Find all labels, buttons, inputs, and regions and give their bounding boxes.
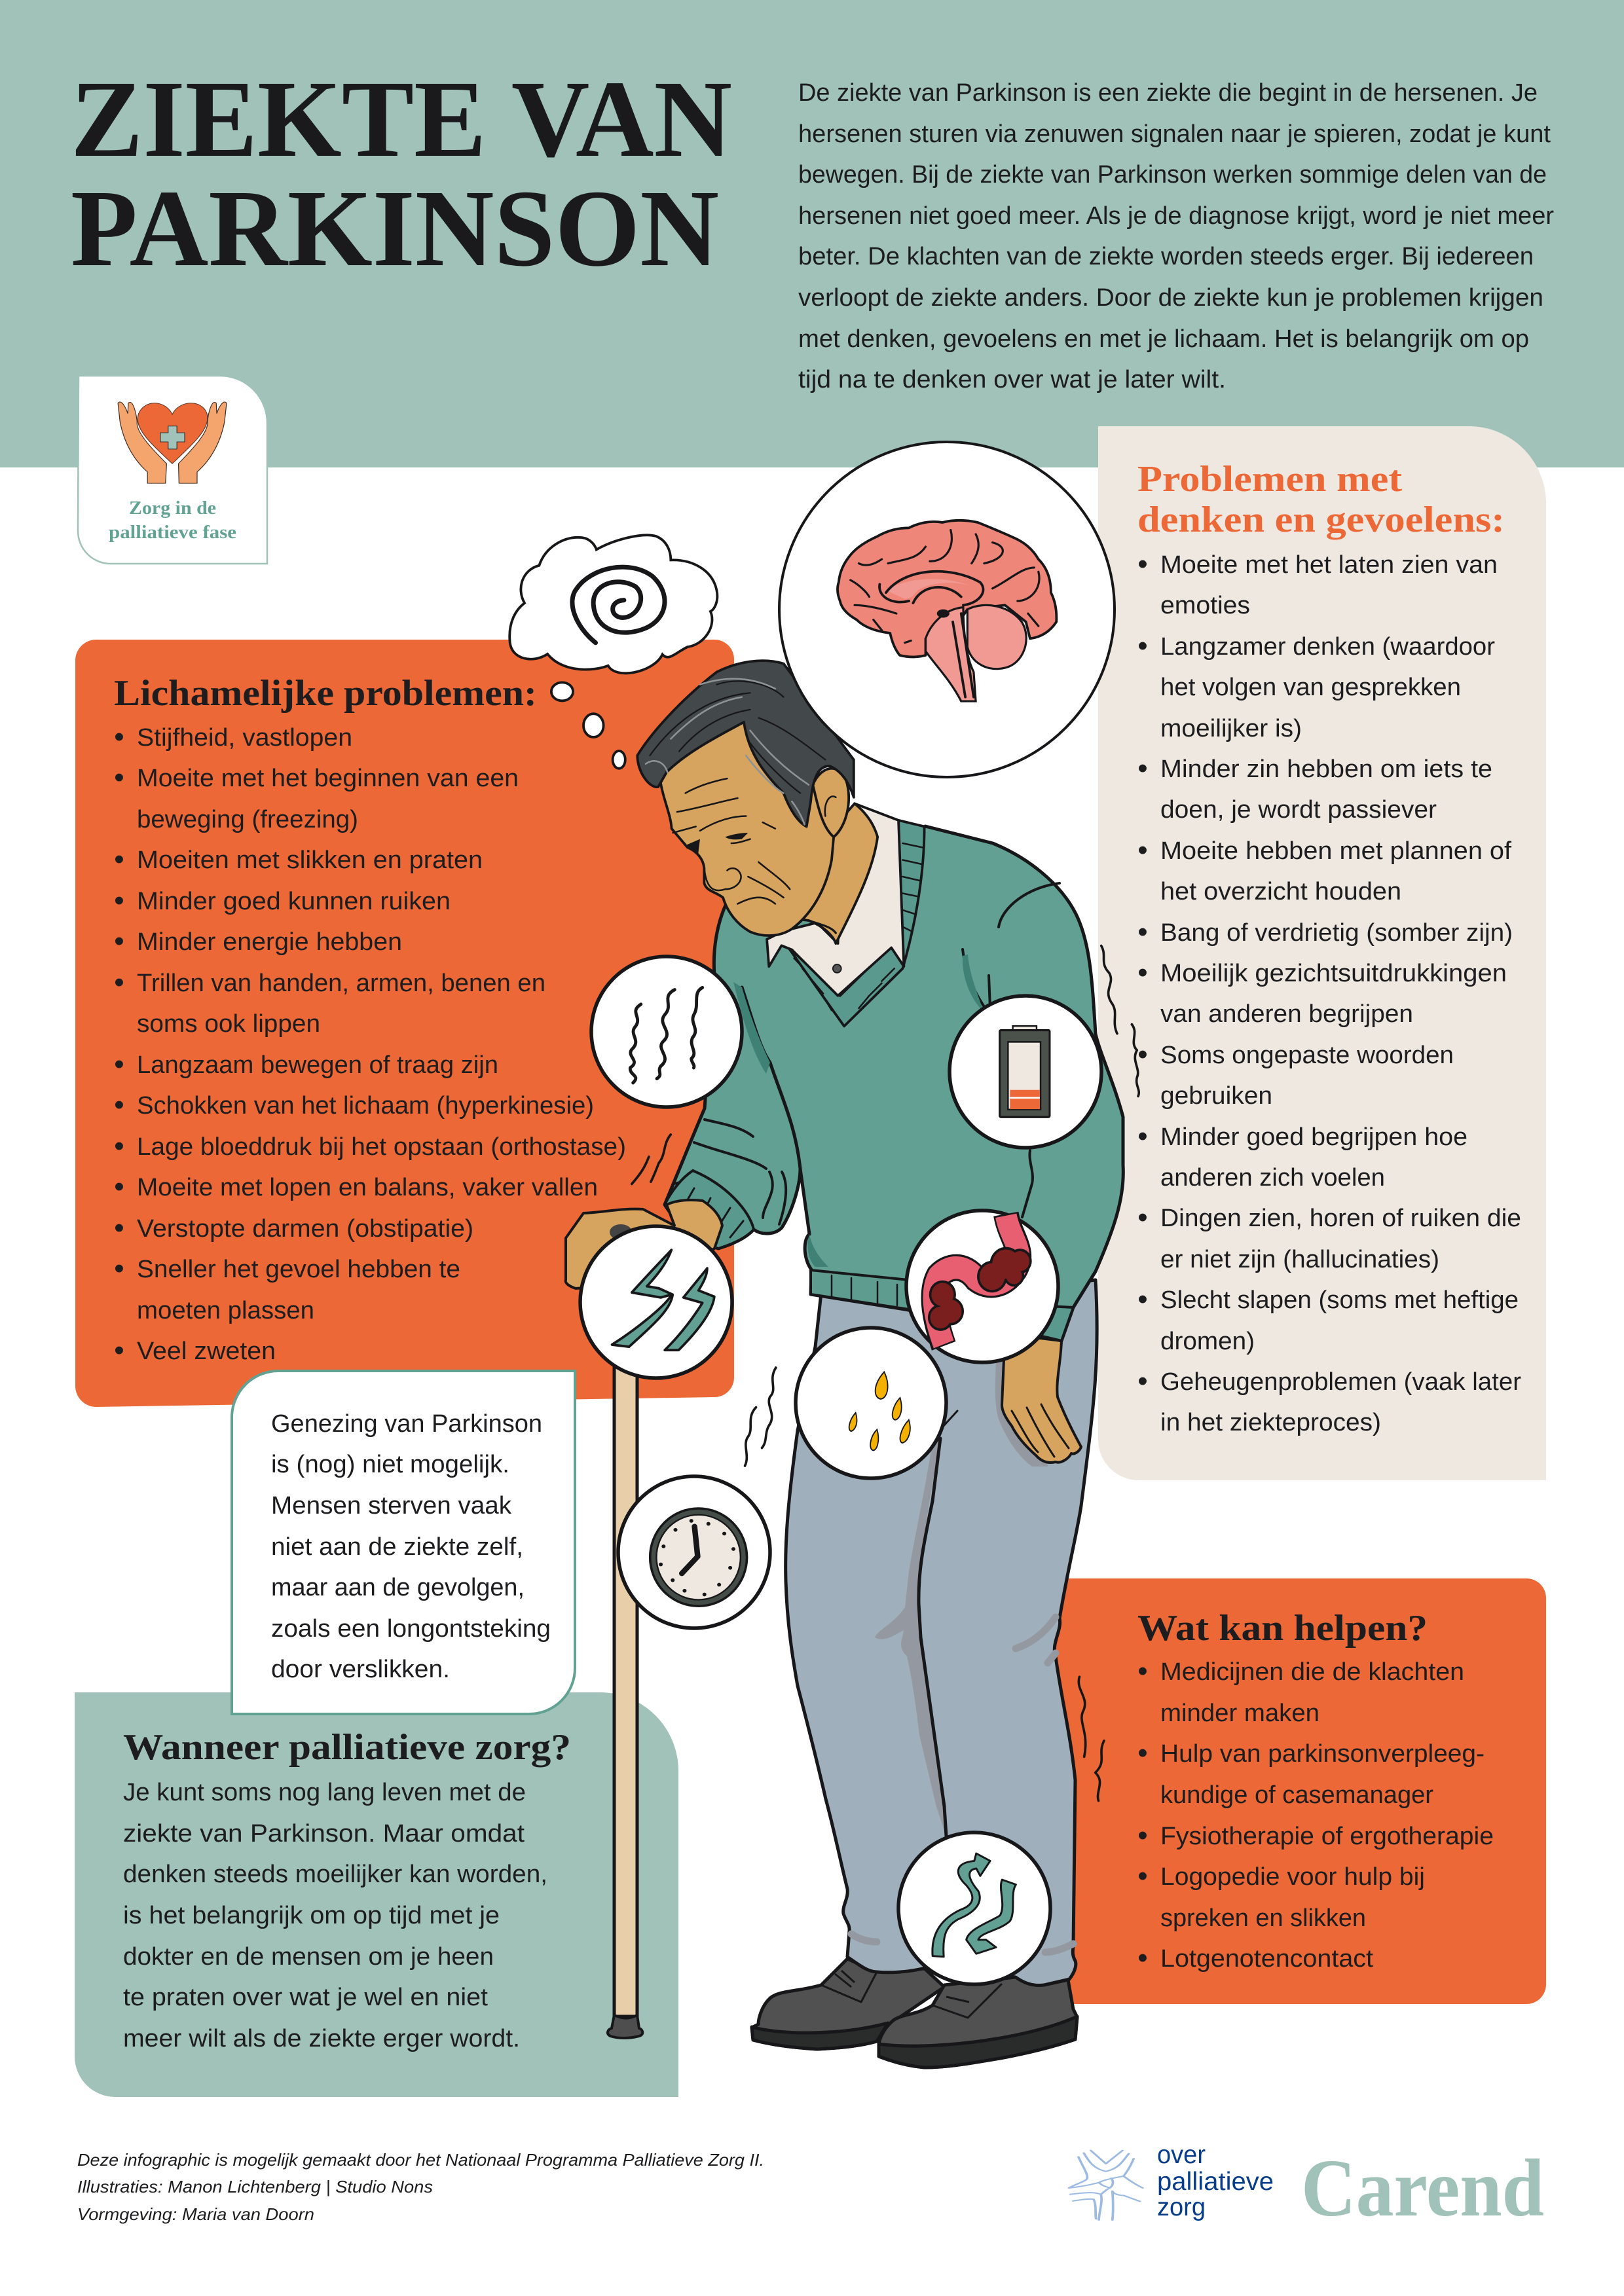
circle: walking balance arrows <box>898 1832 1050 1984</box>
heading: Wat kan helpen? <box>1137 1608 1428 1649</box>
panel: wanneer palliatieve zorg <box>75 1692 678 2097</box>
list: Verstopte darmen (obstipatie) <box>137 1215 473 1243</box>
bullets: • <box>1137 916 1148 948</box>
heading: Lichamelijke problemen: <box>114 673 537 714</box>
body text: is het belangrijk om op tijd met je <box>123 1902 500 1929</box>
intro text: verloopt de ziekte anders. Door de ziekte kun je problemen krijgen <box>798 284 1543 312</box>
body text: denken steeds moeilijker kan worden, <box>123 1861 547 1888</box>
icon: trembling lines <box>630 987 703 1083</box>
thought bubbles <box>551 682 573 701</box>
list: Moeite hebben met plannen of <box>1160 837 1511 865</box>
shoes <box>752 1959 1077 2068</box>
intro text: met denken, gevoelens en met je lichaam. Het is belangrijk om op <box>798 325 1529 353</box>
bullets: • <box>114 1252 124 1285</box>
title <box>71 58 732 289</box>
list: Geheugenproblemen (vaak later <box>1160 1368 1521 1396</box>
list: Medicijnen die de klachten <box>1160 1658 1464 1686</box>
head <box>637 661 854 936</box>
icon: star <box>1069 2151 1143 2220</box>
bullets: • <box>114 1212 124 1244</box>
logo card caption: Zorg in de <box>129 498 216 519</box>
footer credits: Illustraties: Manon Lichtenberg | Studio Nons <box>77 2177 433 2196</box>
bullets <box>114 721 124 1366</box>
list: Moeite met lopen en balans, vaker vallen <box>137 1174 598 1201</box>
intro text: beter. De klachten van de ziekte worden steeds erger. Bij iedereen <box>798 243 1534 270</box>
list: Moeite met het beginnen van een <box>137 765 519 792</box>
bullets: • <box>1137 1942 1148 1974</box>
list: Moeite met het laten zien van <box>1160 551 1498 579</box>
circle: clock <box>618 1476 770 1628</box>
callout: genezing: niet aan de ziekte zelf, <box>271 1533 523 1561</box>
callout: genezing: door verslikken. <box>271 1656 450 1683</box>
bullets: • <box>1137 630 1148 662</box>
list <box>1160 1658 1494 1973</box>
body text: te praten over wat je wel en niet <box>123 1984 488 2011</box>
icon: lightning bolts <box>612 1250 714 1350</box>
bullets: • <box>1137 1655 1148 1687</box>
bullets: • <box>114 1334 124 1366</box>
list: doen, je wordt passiever <box>1160 796 1437 824</box>
list: anderen zich voelen <box>1160 1164 1385 1192</box>
left hand on cane <box>566 1200 722 1288</box>
trousers <box>786 1280 1097 1985</box>
intro text: hersenen niet goed meer. Als je de diagnose krijgt, word je niet meer <box>798 202 1554 230</box>
logo: carend: Carend <box>1301 2143 1544 2234</box>
list: Soms ongepaste woorden <box>1160 1042 1454 1069</box>
list: Minder zin hebben om iets te <box>1160 756 1492 783</box>
list: Minder energie hebben <box>137 928 402 956</box>
intro text: De ziekte van Parkinson is een ziekte die begint in de hersenen. Je <box>798 79 1538 107</box>
logo card: zorg in de palliatieve fase <box>78 376 267 564</box>
bullets <box>1137 548 1148 1397</box>
bullets: • <box>114 1130 124 1162</box>
circle: sweat drops <box>796 1328 946 1478</box>
list: moeilijker is) <box>1160 715 1302 742</box>
bullets: • <box>1137 1283 1148 1315</box>
list: dromen) <box>1160 1328 1255 1355</box>
list: Minder goed begrijpen hoe <box>1160 1123 1467 1151</box>
bullets: • <box>1137 1365 1148 1397</box>
list: beweging (freezing) <box>137 806 358 833</box>
bullets: • <box>1137 1860 1148 1892</box>
list: Moeilijk gezichtsuitdrukkingen <box>1160 960 1507 987</box>
list: Logopedie voor hulp bij <box>1160 1863 1425 1891</box>
circle: brain <box>779 442 1115 777</box>
list: Minder goed kunnen ruiken <box>137 888 451 915</box>
list: Trillen van handen, armen, benen en <box>137 970 545 997</box>
bullets: • <box>114 925 124 957</box>
right hand <box>995 1338 1081 1467</box>
list: spreken en slikken <box>1160 1904 1366 1932</box>
body text: meer wilt als de ziekte erger wordt. <box>123 2025 520 2052</box>
bullets <box>1137 1655 1148 1974</box>
intro text: bewegen. Bij de ziekte van Parkinson werken sommige delen van de <box>798 161 1547 189</box>
bullets: • <box>1137 834 1148 866</box>
face <box>660 710 834 936</box>
body text: ziekte van Parkinson. Maar omdat <box>123 1820 525 1848</box>
list <box>137 724 626 1365</box>
intro text <box>798 79 1554 393</box>
list: Dingen zien, horen of ruiken die <box>1160 1205 1521 1232</box>
list: gebruiken <box>1160 1082 1272 1110</box>
icon: drops <box>849 1372 910 1450</box>
logo wordmark: zorg <box>1157 2193 1206 2221</box>
thought cloud <box>509 535 717 769</box>
icon: wavy arrows <box>932 1853 1016 1957</box>
bullets: • <box>114 721 124 753</box>
icon: low battery <box>1000 1026 1050 1117</box>
intro text: hersenen sturen via zenuwen signalen naar je spieren, zodat je kunt <box>798 120 1551 148</box>
logo wordmark <box>1157 2141 1274 2221</box>
bullets: • <box>1137 548 1148 580</box>
shirt collar and v-neck <box>767 803 925 1026</box>
list: Langzaam bewegen of traag zijn <box>137 1051 498 1079</box>
heading: denken en gevoelens: <box>1137 500 1505 540</box>
footer credits: Deze infographic is mogelijk gemaakt door het Nationaal Programma Palliatieve Zorg II. <box>77 2150 764 2170</box>
body text: Je kunt soms nog lang leven met de <box>123 1779 526 1806</box>
title: PARKINSON <box>71 168 719 289</box>
hair <box>637 661 854 826</box>
list: Moeiten met slikken en praten <box>137 847 483 874</box>
circle: stiffness lightning <box>580 1226 732 1378</box>
list: Bang of verdrietig (somber zijn) <box>1160 919 1513 947</box>
header band <box>0 0 1624 467</box>
circle: constipation intestine <box>906 1211 1058 1362</box>
list: Langzamer denken (waardoor <box>1160 633 1495 661</box>
callout: genezing: is (nog) niet mogelijk. <box>271 1451 509 1478</box>
list: van anderen begrijpen <box>1160 1000 1413 1028</box>
bullets: • <box>1137 752 1148 784</box>
bullets: • <box>114 1048 124 1080</box>
callout: genezing <box>232 1371 575 1714</box>
bullets: • <box>1137 1201 1148 1233</box>
ear <box>813 769 849 837</box>
bullets: • <box>114 966 124 998</box>
bullets: • <box>1137 1737 1148 1769</box>
icon: intestine <box>928 1214 1032 1346</box>
list: emoties <box>1160 592 1250 619</box>
spiral <box>572 567 665 643</box>
list: Lotgenotencontact <box>1160 1945 1373 1973</box>
icon: clock <box>650 1508 747 1606</box>
icon: hands holding heart <box>118 402 227 483</box>
tremor lines <box>632 946 1139 1466</box>
callout: genezing: Mensen sterven vaak <box>271 1492 512 1520</box>
panel: wat kan helpen <box>1048 1578 1546 2004</box>
list: moeten plassen <box>137 1297 314 1324</box>
list: Fysiotherapie of ergotherapie <box>1160 1823 1494 1850</box>
panel: lichamelijke problemen <box>75 640 734 1407</box>
intro text: tijd na te denken over wat je later wilt. <box>798 366 1226 393</box>
callout: genezing: maar aan de gevolgen, <box>271 1574 525 1601</box>
callout: genezing: zoals een longontsteking <box>271 1615 551 1643</box>
face lines <box>673 778 836 904</box>
panel: problemen met denken en gevoelens <box>1098 426 1546 1480</box>
logo wordmark: over <box>1157 2141 1206 2169</box>
sweater <box>665 826 1123 1341</box>
icon: brain <box>838 520 1056 701</box>
logo card caption <box>109 498 236 543</box>
list: Slecht slapen (soms met heftige <box>1160 1286 1519 1314</box>
list: Sneller het gevoel hebben te <box>137 1256 460 1283</box>
heading <box>1137 459 1505 540</box>
tremor lines lower leg <box>1079 1677 1104 1801</box>
list <box>1160 551 1521 1436</box>
logo card caption: palliatieve fase <box>109 522 236 543</box>
body text <box>123 1779 547 2052</box>
list: in het ziekteproces) <box>1160 1409 1381 1436</box>
list: minder maken <box>1160 1700 1320 1727</box>
bullets: • <box>1137 1819 1148 1851</box>
bullets: • <box>114 761 124 793</box>
heading: Problemen met <box>1137 459 1402 500</box>
list: soms ook lippen <box>137 1010 320 1038</box>
bullets: • <box>114 884 124 917</box>
list: het volgen van gesprekken <box>1160 674 1461 701</box>
list: Lage bloeddruk bij het opstaan (orthostase) <box>137 1133 626 1161</box>
bullets: • <box>1137 1038 1148 1070</box>
circle: battery <box>950 996 1101 1148</box>
footer credits: Vormgeving: Maria van Doorn <box>77 2204 314 2224</box>
list: Stijfheid, vastlopen <box>137 724 352 752</box>
title: ZIEKTE VAN <box>71 58 732 180</box>
bullets: • <box>1137 957 1148 989</box>
bullets: • <box>114 1089 124 1121</box>
list: er niet zijn (hallucinaties) <box>1160 1246 1439 1273</box>
callout: genezing: Genezing van Parkinson <box>271 1410 542 1438</box>
circle: tremor <box>591 957 742 1107</box>
cane <box>608 1283 642 2038</box>
bullets: • <box>114 1171 124 1203</box>
list: het overzicht houden <box>1160 878 1401 905</box>
logo wordmark: palliatieve <box>1157 2168 1274 2196</box>
bullets: • <box>114 843 124 875</box>
list: Schokken van het lichaam (hyperkinesie) <box>137 1092 594 1120</box>
list: Veel zweten <box>137 1338 276 1365</box>
bullets: • <box>1137 1120 1148 1152</box>
illustration: man with cane <box>509 535 1139 2068</box>
list: Hulp van parkinsonverpleeg- <box>1160 1740 1485 1768</box>
body text: dokter en de mensen om je heen <box>123 1943 494 1971</box>
list: kundige of casemanager <box>1160 1781 1433 1809</box>
heading: Wanneer palliatieve zorg? <box>123 1727 571 1768</box>
logo: over palliatieve zorg <box>1069 2141 1274 2221</box>
footer credits <box>77 2150 764 2224</box>
